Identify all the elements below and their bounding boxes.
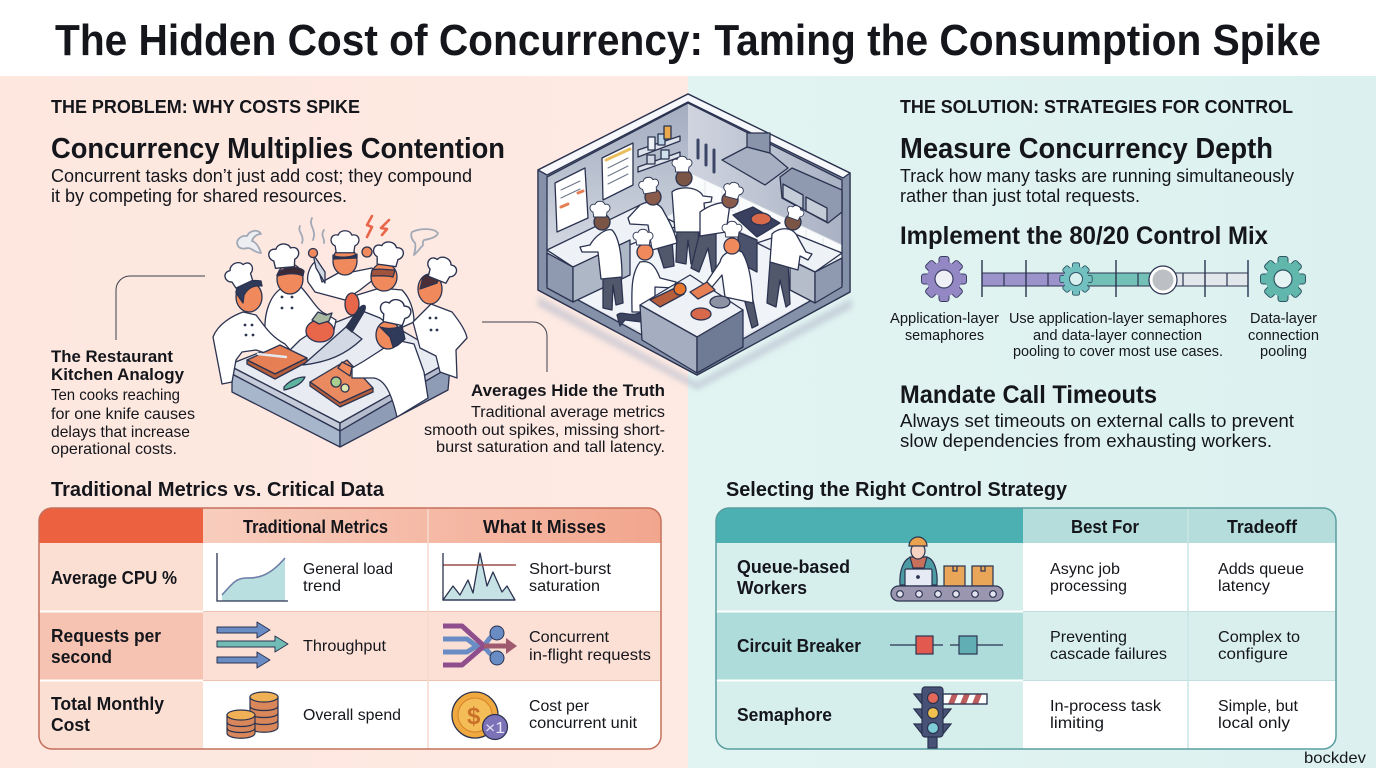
section label: the solution: THE SOLUTION: STRATEGIES FOR CONTROL (900, 97, 1293, 117)
cutting board left (247, 345, 307, 374)
row: semaphore: limiting (1050, 715, 1104, 732)
icon: worker at conveyor (891, 537, 1003, 601)
stress puffs (237, 218, 438, 255)
text block: problem description: it by competing for shared resources. (51, 186, 347, 206)
icon: circuit switch (890, 636, 1003, 654)
chef at island (706, 221, 758, 328)
floor shadow (538, 296, 852, 390)
row: requests per second (51, 622, 651, 668)
row: queue-based workers: Async job (1050, 561, 1120, 578)
column headers (243, 517, 606, 537)
chef left (213, 312, 292, 384)
row: requests per second: Requests per (51, 626, 161, 646)
panel: the solution strategies (900, 97, 1294, 250)
column headers (1071, 517, 1298, 537)
text block: measure description (900, 166, 1294, 206)
shelf with jars (638, 136, 680, 172)
table top (228, 310, 452, 423)
row: circuit breaker: configure (1218, 646, 1288, 663)
outer frame (538, 94, 850, 375)
range hood (722, 147, 788, 185)
right wall (688, 103, 842, 290)
row: queue-based workers: processing (1050, 578, 1127, 595)
row: total monthly cost: Cost (51, 715, 90, 735)
marker: grey knob (1149, 266, 1177, 294)
row: queue-based workers: Adds queue (1218, 561, 1304, 578)
row: total monthly cost: Overall spend (303, 707, 401, 724)
row: average cpu: Short-burst (529, 561, 612, 578)
row: circuit breaker: Circuit Breaker (737, 636, 861, 656)
chef back centre (308, 262, 378, 300)
row: semaphore (737, 687, 1299, 748)
panel: the problem intro (51, 97, 505, 206)
labels: Use application-layer semaphores (1009, 310, 1227, 327)
icon: teal gear (1260, 256, 1306, 302)
row: requests per second: second (51, 647, 112, 667)
column headers: Traditional Metrics (243, 517, 388, 537)
big knife (303, 327, 362, 365)
icon: merging in-flight requests (443, 626, 517, 665)
icon: traffic light with barrier (914, 687, 987, 748)
row: queue-based workers: latency (1218, 578, 1270, 595)
icon: coin with multiplier: $ (467, 703, 481, 730)
row: requests per second: Concurrent (529, 629, 610, 646)
text block: averages hide the truth: smooth out spikes, missing short- (424, 422, 665, 439)
heading: implement the control mix: Implement the 80/20 Control Mix (900, 222, 1268, 250)
chef right (413, 304, 467, 378)
icon: coin stacks (227, 692, 278, 738)
row: semaphore: Semaphore (737, 705, 832, 725)
heading: selecting the right control strategy: Selecting the Right Control Strategy (726, 479, 1068, 501)
row: circuit breaker: Complex to (1218, 629, 1300, 646)
icon: smooth area chart (217, 553, 288, 601)
left counter (547, 205, 680, 267)
text block: measure description: rather than just total requests. (900, 186, 1140, 206)
icon: middle teal gear (1060, 263, 1092, 295)
island (640, 275, 743, 337)
knives on wall (698, 140, 714, 172)
text block: restaurant kitchen analogy (51, 347, 195, 458)
dots on jackets (244, 296, 438, 336)
items on island (650, 288, 684, 307)
row: total monthly cost: concurrent unit (529, 715, 638, 732)
labels: and data-layer connection (1033, 327, 1202, 344)
table cell fills (716, 508, 1336, 749)
labels: Application-layer (890, 310, 999, 327)
column headers: Best For (1071, 517, 1139, 537)
chef centre (672, 156, 712, 264)
diagram: 80/20 control mix (890, 256, 1319, 360)
text block: averages hide the truth: Averages Hide the Truth (471, 381, 665, 400)
heading: traditional metrics vs critical data: Traditional Metrics vs. Critical Data (51, 479, 385, 501)
control bar (982, 260, 1248, 297)
icon: throughput arrows (217, 622, 288, 668)
text block: averages hide the truth (424, 381, 665, 456)
icon: spiky chart (443, 553, 516, 600)
labels: Data-layer (1250, 310, 1317, 327)
header band (0, 0, 1376, 76)
heading: mandate call timeouts: Mandate Call Timeouts (900, 381, 1157, 409)
right counter (757, 232, 842, 272)
column headers: Tradeoff (1227, 517, 1298, 537)
left wall (547, 103, 688, 290)
text block: restaurant kitchen analogy: delays that increase (51, 424, 190, 441)
row: queue-based workers: Queue-based (737, 557, 850, 577)
table border (39, 508, 661, 749)
row: total monthly cost: Cost per (529, 698, 590, 715)
text block: timeouts description (900, 411, 1294, 451)
icon: purple gear (922, 256, 966, 302)
posters (555, 168, 588, 232)
row: average cpu (51, 553, 612, 601)
row: average cpu: Average CPU % (51, 568, 177, 588)
labels: connection (1248, 327, 1319, 344)
top rim (538, 94, 850, 178)
row: semaphore: Simple, but (1218, 698, 1299, 715)
text block: timeouts description: slow dependencies from exhausting workers. (900, 431, 1272, 451)
labels: pooling (1260, 343, 1307, 360)
row: requests per second: Throughput (303, 638, 387, 655)
text block: timeouts description: Always set timeouts on external calls to prevent (900, 411, 1294, 431)
labels: semaphores (905, 327, 984, 344)
text block: measure description: Track how many tasks are running simultaneously (900, 166, 1294, 186)
text block: restaurant kitchen analogy: The Restaurant (51, 347, 173, 366)
illustration: isometric kitchen (538, 94, 852, 390)
text block: problem description: Concurrent tasks don’t just add cost; they compound (51, 166, 472, 186)
walls outer shell (538, 94, 850, 375)
panel: mandate call timeouts (900, 381, 1294, 451)
heading: concurrency multiplies contention: Concurrency Multiplies Contention (51, 133, 505, 165)
chef front (352, 340, 428, 417)
text block: restaurant kitchen analogy: Ten cooks reaching (51, 387, 180, 404)
icon: coin with multiplier: ×1 (485, 720, 505, 737)
text block: averages hide the truth: Traditional average metrics (471, 404, 665, 421)
labels: pooling to cover most use cases. (1013, 343, 1223, 360)
cutting board right (310, 360, 373, 403)
chef back right (350, 288, 414, 330)
kneeling chef (617, 229, 676, 326)
heading: measure concurrency depth: Measure Concurrency Depth (900, 133, 1273, 165)
table sides (232, 374, 340, 447)
icon: coin with multiplier (452, 692, 508, 740)
chef at right counter (767, 203, 812, 307)
background: solution side (688, 76, 1376, 768)
chef at sink (628, 176, 677, 268)
table cell fills (39, 508, 661, 749)
anger sparks (367, 216, 389, 237)
wall cabinets (780, 168, 842, 223)
column headers: What It Misses (483, 517, 606, 537)
table slab edges (228, 365, 340, 431)
row: circuit breaker: cascade failures (1050, 646, 1167, 663)
chef right of centre (691, 180, 745, 272)
connector: kitchen analogy (116, 276, 205, 340)
wall tiles (688, 172, 842, 292)
text block: averages hide the truth: burst saturation and tall latency. (436, 439, 665, 456)
watermark: bockdev (1304, 750, 1366, 767)
table: traditional metrics vs critical data (39, 508, 661, 749)
text block: problem description (51, 166, 472, 206)
stove (733, 207, 780, 237)
text block: restaurant kitchen analogy: operational costs. (51, 441, 177, 458)
section label: the problem: THE PROBLEM: WHY COSTS SPIKE (51, 97, 360, 117)
chef left counter (580, 201, 623, 310)
labels (890, 310, 1319, 360)
connector: averages (482, 322, 547, 372)
floor (547, 205, 842, 362)
table border (716, 508, 1336, 749)
text block: restaurant kitchen analogy: for one knife causes (51, 406, 195, 423)
table: selecting the right control strategy (716, 508, 1336, 749)
background: problem side (0, 76, 688, 768)
row: queue-based workers: Workers (737, 578, 807, 598)
row: semaphore: In-process task (1050, 698, 1162, 715)
row: circuit breaker (737, 629, 1300, 663)
row: total monthly cost (51, 692, 638, 740)
row: circuit breaker: Preventing (1050, 629, 1127, 646)
row: average cpu: saturation (529, 578, 600, 595)
row: total monthly cost: Total Monthly (51, 694, 164, 714)
chef back left (265, 286, 336, 352)
illustration: chefs fighting over one knife (213, 216, 467, 447)
row: requests per second: in-flight requests (529, 647, 651, 664)
row: average cpu: trend (303, 578, 341, 595)
row: average cpu: General load (303, 561, 393, 578)
vegetables (306, 320, 334, 342)
text block: restaurant kitchen analogy: Kitchen Analogy (51, 365, 185, 384)
row: queue-based workers (737, 537, 1304, 601)
row: semaphore: local only (1218, 715, 1290, 732)
